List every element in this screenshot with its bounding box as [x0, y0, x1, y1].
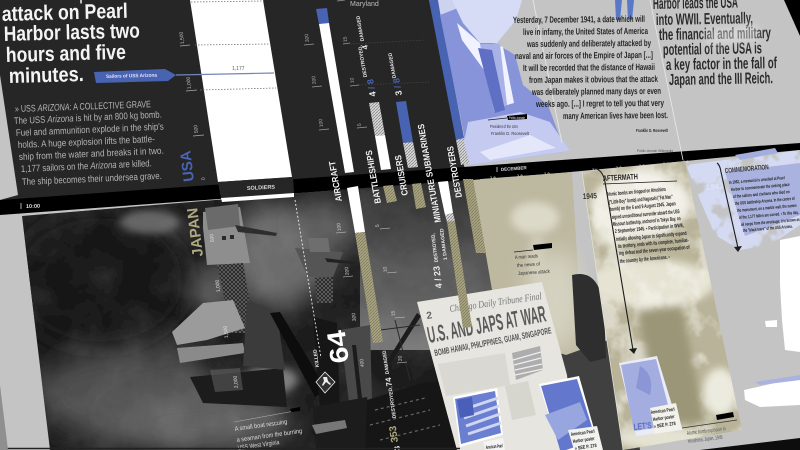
panel: Aftermath — [580, 160, 750, 450]
panel: newspaper: U.S. AND JAPS AT WAR — [425, 300, 548, 348]
stat: battleships USA — [356, 15, 378, 97]
text block: Roosevelt speech: weeks ago. [...] I regret to tell you that very — [535, 98, 664, 109]
axis: soldiers USA — [179, 31, 207, 180]
caption: Hiroshima: Atomic bomb explosion in — [687, 426, 726, 437]
bar: cruisers Japan — [412, 183, 426, 209]
timeline labels: 1.9 — [639, 163, 645, 168]
text block: Roosevelt speech: It will be recorded that the distance of Hawaii — [523, 62, 655, 73]
bar: soldiers: 1,177 — [232, 66, 245, 72]
panel: Commemoration map: 1942 — [705, 181, 724, 192]
newspaper number: 2 — [426, 310, 433, 322]
text block: USS Arizona: The ship becomes their undersea grave. — [22, 171, 162, 188]
axis: aircraft and ships USA: 5 — [357, 123, 363, 126]
axis: aircraft and ships Japan: 5 — [375, 224, 381, 227]
masthead: Chicago Daily Tribune Final — [449, 291, 543, 315]
text block: Aftermath: ing defeat and the seven-year occupation of — [619, 245, 690, 257]
bar labels: BATTLESHIPS — [364, 149, 383, 204]
timeline labels: 1.9 — [517, 173, 523, 178]
axis: soldiers USA: 0 — [201, 177, 207, 180]
timeline labels: 1.9 — [592, 167, 598, 172]
timeline labels: 1.9 — [683, 159, 689, 164]
bar: submarines Japan stat — [430, 228, 449, 289]
text block: USS Arizona: 1,177 sailors on the Arizona are killed. — [21, 158, 152, 175]
stat: aircraft Japan: DAMAGED — [382, 350, 391, 375]
axis: soldiers USA: 1,000 — [186, 76, 193, 89]
timeline labels: 1.9 — [663, 161, 669, 166]
bar: submarines Japan stat: 1 DAMAGED — [439, 228, 449, 260]
heading: Harbor lasts two — [4, 19, 140, 46]
portrait caption: Franklin D. Roosevelt — [491, 131, 530, 136]
panel: dark chart panel USA — [0, 0, 465, 205]
bar: submarines Japan stat: DESTROYED, — [430, 232, 440, 262]
stat: aircraft Japan — [382, 350, 402, 450]
timeline labels: 1.9 — [490, 175, 496, 180]
caption: rescue photo: a seaman from the burning — [236, 428, 303, 444]
bar: soldiers: SOLDIERS — [247, 185, 276, 192]
text block: Roosevelt speech: was deliberately planned many days or even — [531, 86, 661, 97]
ship: funnel and hull — [312, 313, 470, 450]
caption: Hiroshima: Hiroshima, Japan, 1945 — [688, 435, 723, 445]
text block: USS Arizona — [14, 99, 164, 188]
panel: man reading newspaper photo — [473, 172, 640, 450]
axis: aircraft and ships USA: 100 — [318, 118, 325, 127]
label: USA: USA — [177, 150, 198, 183]
poster: Aftermath: Harbor poster — [652, 414, 675, 423]
panel: man reading newspaper photo: Japanese attack — [518, 269, 550, 277]
text block: Roosevelt speech: Franklin D. Roosevelt — [636, 128, 668, 133]
axis: aircraft and ships USA: 300 — [304, 33, 311, 42]
text block: Aftermath: 2 September 1945. ▪ Participation in WWII, — [615, 223, 684, 235]
bar labels — [327, 123, 464, 223]
poster: Aftermath — [619, 356, 683, 436]
text block: Roosevelt speech — [513, 14, 668, 133]
poster: Aftermath: LET'S — [633, 420, 652, 432]
timeline labels — [21, 159, 689, 210]
text block: Roosevelt speech: many American lives have been lost. — [563, 110, 668, 121]
public domain note: Public domain Wikimedia — [637, 149, 673, 153]
axis: aircraft and ships USA: 10 — [349, 77, 356, 83]
poster: warship image: Harbor poster — [572, 436, 595, 445]
caption: rescue photo: A small boat rescuing — [234, 419, 288, 433]
poster: warship image: American Pearl — [570, 429, 595, 438]
text block: USS Arizona: The USS Arizona is hit by an 800 kg bomb. — [14, 110, 162, 127]
text block: Aftermath: the country by the Americans. ▪ — [620, 255, 670, 265]
stat: soldiers killed Japan: KILLED — [312, 348, 321, 368]
panel: lower photo of burning ship — [10, 170, 500, 450]
bar labels: AIRCRAFT — [327, 160, 344, 202]
label: Japan: JAPAN — [184, 207, 207, 258]
panel: Commemoration map — [680, 148, 800, 407]
stat: aircraft Japan: 353 — [388, 425, 401, 443]
left paper edge — [0, 75, 18, 200]
ship: rear tower — [295, 238, 348, 303]
panel: man reading newspaper photo: A man reads — [515, 253, 538, 261]
text block: Roosevelt speech: live in infamy, the United States of America — [523, 26, 649, 37]
stat: battleships USA: 4 / 8 — [365, 78, 378, 97]
axis: aircraft and ships Japan: 300 — [351, 312, 358, 321]
text block: Roosevelt speech: naval and air forces of the Empire of Japan [...] — [515, 50, 653, 61]
text block: Aftermath: signed unconditional surrender aboard the USS — [612, 209, 680, 221]
portrait caption: President of the USA — [490, 124, 518, 129]
poster: warship image — [539, 376, 603, 450]
bar: destroyers Japan — [463, 179, 486, 253]
bottom edges — [700, 438, 800, 450]
stat: soldiers killed Japan — [295, 200, 355, 393]
axis: aircraft and ships Japan: 20 — [397, 355, 404, 361]
poster: Aftermath: » SEE P. 278 — [653, 421, 676, 430]
panel: newspaper — [417, 282, 575, 450]
text block: Aftermath: Missouri battleship, anchored in Tokyo Bay, on — [613, 216, 681, 228]
bar labels: MINIATURE SUBMARINES — [416, 123, 443, 223]
axis: aircraft and ships Japan: 10 — [382, 266, 389, 272]
bar labels: CRUISERS — [393, 154, 410, 196]
heading: hours and five — [6, 41, 126, 67]
stat: battleships USA: 4 — [360, 44, 370, 50]
axis: aircraft and ships USA: 200 — [311, 75, 318, 84]
text block: Roosevelt speech: Yesterday, 7 December 1941, a date which will — [513, 14, 645, 25]
text block: USS Arizona: Fuel and ammunition explode in the ship's — [16, 122, 164, 139]
heading: Commemoration: COMMEMORATION — [725, 164, 769, 175]
axis: soldiers Japan — [209, 233, 240, 388]
axis: aircraft and ships Japan: 400 — [359, 358, 366, 367]
text block: USS Arizona: ship from the water and breaks it in two. — [19, 146, 164, 163]
location label Maryland: Maryland — [350, 1, 379, 8]
poster: flag image — [453, 388, 505, 450]
text block: conclusion — [653, 0, 777, 89]
text block: Commemoration — [729, 175, 800, 233]
bar: battleships Japan — [383, 185, 397, 203]
axis: aircraft and ships Japan: 200 — [344, 266, 351, 275]
panel: Roosevelt portrait — [429, 0, 683, 165]
panel: man reading newspaper photo: the news of — [517, 261, 541, 269]
caption: rescue photo — [234, 407, 303, 450]
text block: USS Arizona: holds. A huge explosion lifts the battle- — [18, 134, 155, 151]
stat: soldiers killed Japan: 64 — [321, 328, 355, 365]
stat: cruisers USA: 3 / 8 — [391, 77, 404, 96]
bar: submarines Japan — [438, 181, 472, 328]
heading: Aftermath: AFTERMATH — [603, 172, 638, 183]
callout: Sailors of USS Arizona — [94, 69, 274, 83]
newspaper columns — [438, 353, 510, 396]
stat: aircraft Japan: DESTROYED, — [388, 385, 398, 419]
axis: soldiers USA: 1,500 — [179, 31, 186, 44]
axis: aircraft and ships USA: 15 — [342, 36, 349, 42]
axis: aircraft and ships Japan: 15 — [390, 310, 397, 316]
aftermath arrow — [594, 168, 677, 354]
bar: soldiers — [190, 0, 294, 202]
bar: aircraft USA — [316, 8, 354, 173]
ship: diagonal crane — [270, 312, 319, 396]
text block: Roosevelt speech: from Japan makes it obvious that the attack — [529, 74, 659, 85]
text block: Roosevelt speech: was suddenly and deliberately attacked by — [526, 38, 651, 49]
heading: minutes. — [9, 63, 84, 88]
text block: Aftermath: initially allowing Japan to significantly expand — [616, 231, 687, 243]
heading — [2, 0, 140, 88]
stat: aircraft Japan: 74 — [384, 376, 394, 387]
axis: aircraft and ships Japan — [336, 222, 407, 367]
stat: cruisers USA — [388, 52, 404, 96]
text block: Aftermath: its territory, ends with its complete, humiliat- — [618, 238, 689, 250]
bar: battleships USA — [369, 102, 391, 170]
text block: Aftermath — [607, 187, 690, 265]
portrait caption: Public domain — [509, 116, 525, 120]
portrait caption — [488, 114, 530, 136]
text block: USS Arizona: » USS ARIZONA: A COLLECTIVE GRAVE — [15, 99, 151, 115]
axis: soldiers USA: 500 — [193, 124, 200, 133]
top right corner — [784, 0, 800, 36]
axis: aircraft and ships Japan: 100 — [336, 222, 343, 231]
axis: soldiers Japan: 500 — [209, 233, 216, 242]
timeline labels: DECEMBER — [501, 165, 528, 172]
axis: aircraft and ships USA — [304, 0, 430, 130]
watermark smudge — [705, 24, 760, 46]
bar: submarines Japan stat: 4 / 23 — [431, 265, 444, 289]
caption: Hiroshima — [682, 412, 737, 445]
timeline labels: 1.9 — [544, 171, 550, 176]
timeline labels: 10:00 — [26, 204, 40, 210]
text block: Aftermath: bomb) on the 6 and 9 August 1945. Japan — [610, 201, 676, 213]
bar labels: DESTROYERS — [445, 145, 464, 198]
poster: Aftermath: American Pearl — [650, 407, 675, 416]
bar: aircraft Japan — [347, 186, 383, 343]
text block: Aftermath: Atomic bombs are dropped on Hiroshima — [607, 187, 666, 198]
ship: forward tower — [203, 204, 277, 333]
bar: cruisers USA — [396, 101, 418, 168]
timeline labels: 1.9 — [616, 165, 622, 170]
ship: bridge — [172, 300, 287, 407]
axis: soldiers Japan: 2,000 — [233, 375, 240, 388]
stat: battleships USA: DAMAGED — [356, 15, 366, 42]
stat: battleships USA: DESTROYED, — [357, 44, 369, 78]
stat: cruisers USA: DAMAGED — [388, 52, 398, 79]
text block: Aftermath: ("Little Boy" bomb) and Nagasaki ("Fat Man" — [609, 194, 673, 206]
callout: Sailors of USS Arizona: Sailors of USS Arizona — [106, 73, 157, 80]
commemoration arrow — [717, 163, 742, 252]
axis: soldiers Japan: 1,500 — [223, 325, 230, 338]
black timeline band — [0, 143, 800, 215]
subheadline: BOMB HAWAII, PHILIPPINES, GUAM, SINGAPORE — [433, 325, 552, 358]
year: 1945: 1945 — [583, 191, 598, 201]
axis: soldiers Japan: 1,000 — [215, 279, 222, 292]
newspaper flag — [512, 346, 543, 380]
